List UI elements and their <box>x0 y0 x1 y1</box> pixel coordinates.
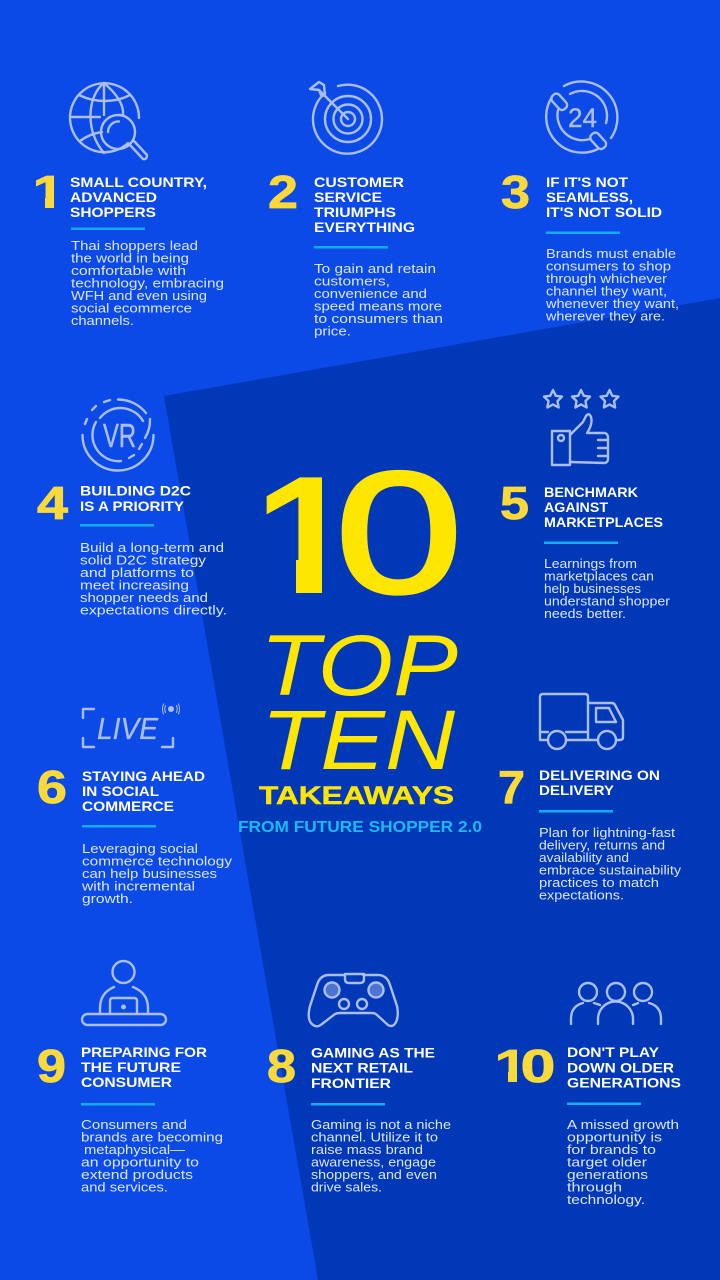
icon: delivery truck <box>540 694 623 749</box>
heading: FRONTIER <box>311 1075 391 1091</box>
body text <box>80 540 227 618</box>
body text: shopper needs and <box>80 590 208 605</box>
heading: SHOPPERS <box>70 204 156 220</box>
body text: extend products <box>81 1167 194 1182</box>
icon: globe with magnifier <box>70 83 147 159</box>
panel: takeaway 7 <box>498 694 682 902</box>
body text: opportunity is <box>567 1130 663 1144</box>
body text <box>544 556 671 621</box>
heading: ADVANCED <box>70 189 157 205</box>
number 8: 8 <box>267 1040 296 1092</box>
body text: with incremental <box>81 878 195 894</box>
body text: embrace sustainability <box>539 862 682 878</box>
number 6: 6 <box>37 761 67 813</box>
body text: practices to match <box>539 875 659 890</box>
panel: takeaway 9 <box>37 961 223 1194</box>
heading: STAYING AHEAD <box>82 768 205 784</box>
body text: marketplaces can <box>544 568 654 584</box>
icon: live broadcast: LIVE <box>97 711 158 746</box>
body text: awareness, engage <box>311 1154 436 1170</box>
heading: SERVICE <box>314 189 382 205</box>
dark background panel <box>164 298 720 1280</box>
number 10: 0 <box>520 1040 556 1092</box>
body text <box>311 1117 451 1194</box>
body text <box>539 825 682 902</box>
panel: takeaway 2 <box>268 82 443 338</box>
body text: To gain and retain <box>314 261 436 276</box>
body text <box>81 1117 223 1194</box>
heading: CUSTOMER <box>314 174 404 190</box>
heading: CONSUMER <box>81 1074 172 1090</box>
body text: and services. <box>81 1180 168 1194</box>
heading: TRIUMPHS <box>314 204 396 220</box>
body text: Gaming is not a niche <box>311 1117 451 1132</box>
heading: DELIVERY <box>539 782 615 798</box>
body text: shoppers, and even <box>311 1167 437 1182</box>
icon: VR badge <box>82 399 154 470</box>
body text: Leveraging social <box>82 841 198 856</box>
number 3: 3 <box>501 166 530 218</box>
icon: VR badge: VR <box>103 417 136 454</box>
heading <box>546 174 662 220</box>
body text: an opportunity to <box>81 1154 199 1170</box>
body text: for brands to <box>567 1142 656 1157</box>
heading <box>567 1044 681 1090</box>
number 2: 2 <box>268 166 298 218</box>
body text: help businesses <box>544 581 642 596</box>
number 1: 1 <box>31 166 67 218</box>
heading: SEAMLESS, <box>546 189 633 205</box>
big number 10: 0 <box>335 437 462 629</box>
body text <box>545 246 679 324</box>
icon: live broadcast <box>83 704 180 747</box>
heading: DOWN OLDER <box>567 1060 674 1076</box>
panel: takeaway 4 <box>37 399 227 618</box>
heading: GAMING AS THE <box>311 1044 435 1060</box>
heading: IF IT'S NOT <box>546 174 628 190</box>
number 10: 1 <box>494 1040 530 1092</box>
body text: and platforms to <box>80 565 194 580</box>
heading <box>314 174 415 235</box>
heading: PREPARING FOR <box>81 1044 207 1060</box>
heading: IN SOCIAL <box>82 783 159 799</box>
body text: Brands must enable <box>546 246 676 261</box>
heading: IT'S NOT SOLID <box>546 204 662 220</box>
heading: COMMERCE <box>82 798 174 814</box>
heading: SMALL COUNTRY, <box>70 174 207 190</box>
heading: IS A PRIORITY <box>80 498 185 514</box>
heading: DON'T PLAY <box>567 1044 660 1060</box>
icon: person at laptop <box>82 961 166 1025</box>
icon: target with arrow <box>310 82 382 154</box>
body text: delivery, returns and <box>539 838 665 852</box>
big number 10: 1 <box>254 441 360 629</box>
body text: meet increasing <box>80 578 189 592</box>
subtitle: FROM FUTURE SHOPPER 2.0 <box>238 819 482 836</box>
body text: consumers to shop <box>546 258 671 274</box>
body text: speed means more <box>314 298 442 314</box>
heading <box>311 1044 435 1091</box>
panel: takeaway 10 <box>494 983 681 1207</box>
body text: customers, <box>314 274 390 288</box>
heading: EVERYTHING <box>314 219 415 235</box>
body text: expectations. <box>539 888 624 902</box>
title: TEN: TEN <box>261 693 455 787</box>
body text <box>567 1117 679 1207</box>
panel: takeaway 5 <box>500 390 671 621</box>
body text: needs better. <box>544 606 626 621</box>
heading <box>80 482 191 514</box>
heading: MARKETPLACES <box>544 514 663 530</box>
body text: target older <box>567 1154 648 1170</box>
heading <box>544 484 663 530</box>
heading <box>539 767 660 798</box>
number 5: 5 <box>500 477 529 529</box>
icon: game controller <box>309 974 398 1026</box>
heading: NEXT RETAIL <box>311 1060 413 1076</box>
icon: 24 hour phone: 24 <box>568 103 597 133</box>
body text <box>81 841 233 906</box>
number 10 <box>498 1049 554 1083</box>
body text: through <box>567 1180 622 1194</box>
panel: takeaway 1 <box>31 83 224 328</box>
body text: Thai shoppers lead <box>71 238 198 253</box>
body text: Plan for lightning-fast <box>539 825 675 840</box>
body text: comfortable with <box>71 263 186 278</box>
number 9: 9 <box>37 1040 66 1092</box>
body text: metaphysical— <box>84 1142 185 1157</box>
body text: channel. Utilize it to <box>311 1130 438 1144</box>
icon: 24 hour phone <box>546 82 617 153</box>
body text: channels. <box>71 313 134 328</box>
body text: solid D2C strategy <box>80 552 207 568</box>
body text: Build a long-term and <box>80 540 224 555</box>
icon: three people <box>571 983 661 1024</box>
body text: understand shopper <box>544 594 671 608</box>
body text: technology, embracing <box>71 276 224 290</box>
body text: price. <box>314 324 351 338</box>
title block <box>238 437 482 836</box>
body text: brands are becoming <box>81 1130 223 1144</box>
body text: convenience and <box>314 286 427 301</box>
heading <box>81 1044 207 1090</box>
heading: GENERATIONS <box>567 1074 681 1090</box>
heading: THE FUTURE <box>81 1059 181 1075</box>
panel: takeaway 3 <box>501 82 679 323</box>
body text: Learnings from <box>544 556 637 571</box>
heading: BUILDING D2C <box>80 482 191 498</box>
body text: commerce technology <box>82 854 233 868</box>
title: TAKEAWAYS: TAKEAWAYS <box>259 782 454 810</box>
title: TOP: TOP <box>260 618 458 714</box>
body text: Consumers and <box>81 1117 187 1132</box>
body text <box>314 261 443 338</box>
body text: expectations directly. <box>80 602 227 618</box>
body text: through whichever <box>546 271 668 286</box>
heading: AGAINST <box>544 499 608 515</box>
heading <box>70 174 207 220</box>
panel: takeaway 8 <box>267 974 451 1194</box>
body text: channel they want, <box>546 284 667 298</box>
body text: can help businesses <box>82 866 218 881</box>
heading <box>82 768 205 814</box>
body text: technology. <box>567 1192 645 1207</box>
number 1 <box>36 176 54 208</box>
big number 10 <box>266 470 456 596</box>
body text: generations <box>567 1167 649 1182</box>
heading: DELIVERING ON <box>539 767 660 783</box>
body text: the world in being <box>71 250 189 266</box>
body text <box>71 238 224 328</box>
body text: drive sales. <box>311 1180 382 1194</box>
heading: BENCHMARK <box>544 484 638 500</box>
number 4: 4 <box>37 477 68 529</box>
body text: growth. <box>82 891 133 906</box>
body text: WFH and even using <box>71 288 207 303</box>
body text: social ecommerce <box>71 300 192 316</box>
body text: availability and <box>539 850 629 865</box>
body text: to consumers than <box>314 311 443 326</box>
panel: takeaway 6 <box>37 704 233 906</box>
icon: stars and thumbs up <box>544 390 618 465</box>
body text: raise mass brand <box>311 1142 423 1157</box>
body text: A missed growth <box>567 1117 679 1132</box>
body text: whenever they want, <box>545 296 679 311</box>
number 7: 7 <box>498 761 525 813</box>
body text: wherever they are. <box>545 308 665 324</box>
